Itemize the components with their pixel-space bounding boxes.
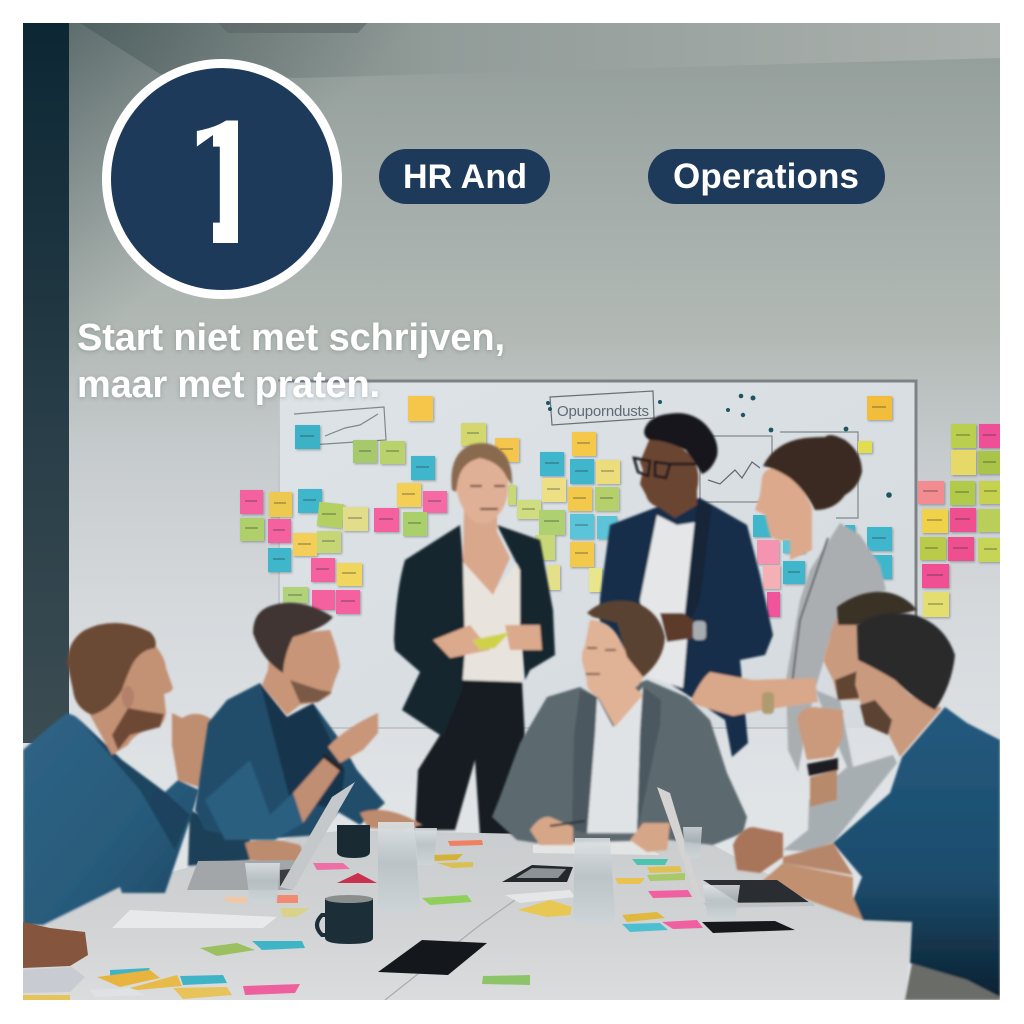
face	[455, 456, 508, 524]
neck and face	[755, 469, 812, 560]
number badge	[106, 46, 338, 294]
badge circle	[106, 64, 338, 294]
person: man with raised hand in blue shirt	[195, 603, 423, 840]
bracelet	[323, 755, 342, 770]
torso shadow	[76, 716, 190, 850]
blazer	[786, 523, 886, 772]
beard	[860, 700, 892, 735]
neck and face	[855, 650, 942, 757]
headline text	[77, 317, 505, 406]
hair	[67, 623, 156, 715]
blazer	[600, 498, 773, 757]
face	[823, 620, 860, 700]
raised hand	[328, 713, 378, 763]
hands	[530, 817, 670, 852]
papers, tablets and phone	[23, 837, 795, 1000]
hair	[253, 603, 333, 673]
neck and chest	[463, 510, 510, 595]
face	[582, 620, 645, 727]
person: woman in black blazer, standing	[394, 443, 555, 835]
t-shirt	[640, 515, 697, 688]
yellow note	[472, 632, 510, 650]
ear	[122, 686, 134, 708]
whiteboard	[278, 380, 916, 728]
face and neck	[262, 630, 340, 715]
hair	[837, 592, 917, 625]
shirt	[195, 683, 385, 840]
pill: HR And: HR And	[403, 158, 527, 196]
beard	[835, 670, 860, 700]
arm and hand	[690, 672, 818, 716]
trousers	[905, 963, 1000, 1000]
fist	[172, 713, 221, 787]
trousers	[415, 680, 530, 835]
ceiling light	[218, 23, 367, 33]
person: woman with hair bun in grey blazer	[690, 435, 886, 772]
right laptop	[657, 787, 815, 908]
handwriting on the sticky notes	[245, 407, 997, 604]
headline text: Start niet met schrijven,	[77, 317, 505, 359]
hair	[451, 443, 512, 492]
person: bearded man in blue shirt, far left	[23, 623, 308, 925]
pill: HR And	[379, 149, 550, 204]
person: man in grey sweater, far side	[783, 592, 917, 852]
shirt	[587, 687, 643, 833]
conference table	[23, 830, 912, 1000]
upper forearm	[783, 843, 853, 875]
headline text: maar met praten.	[77, 364, 380, 406]
person: man in navy blazer, standing	[600, 413, 773, 757]
lapel	[683, 500, 712, 619]
shirt	[833, 707, 1000, 997]
watch	[762, 692, 774, 714]
blazer right	[497, 525, 555, 680]
whiteboard dots	[546, 394, 892, 498]
hands	[733, 827, 783, 873]
shirt	[23, 713, 199, 925]
hair	[857, 613, 955, 710]
neck and face	[90, 640, 173, 755]
pen	[550, 821, 585, 826]
whiteboard sketches: Opuporndusts	[557, 403, 649, 420]
hand and watch	[660, 613, 695, 642]
beard	[112, 708, 164, 750]
table seam	[385, 895, 522, 1000]
sweater	[783, 690, 897, 852]
pill: Operations: Operations	[673, 157, 859, 196]
face	[640, 438, 698, 518]
lower forearm	[760, 863, 863, 920]
chest shadow	[260, 683, 345, 810]
lapels	[572, 687, 661, 833]
water glasses and carafes	[245, 822, 740, 925]
forearm	[810, 770, 837, 807]
blazer	[492, 680, 747, 845]
pill: Operations	[648, 149, 885, 204]
beard	[290, 680, 332, 703]
eyes and mouth	[470, 486, 505, 509]
number 1: 1	[179, 46, 279, 292]
hair	[644, 413, 718, 474]
fist	[797, 707, 843, 760]
eyes and mouth	[586, 648, 616, 674]
forearm	[293, 757, 340, 823]
hair	[587, 600, 665, 677]
person: man with dark hair in blue shirt, foreground right	[733, 613, 1000, 1000]
lapel line	[790, 538, 828, 700]
ceiling	[80, 23, 1000, 78]
person: man in grey suit, centre	[492, 600, 747, 852]
hand at lower left	[23, 922, 88, 968]
dark pillar	[23, 23, 69, 743]
mugs	[317, 825, 373, 944]
blazer left	[394, 525, 465, 737]
hand on table	[360, 810, 423, 830]
left laptop	[187, 782, 355, 890]
glasses	[634, 458, 696, 478]
hair and bun	[763, 435, 862, 510]
sticky notes on the table	[97, 840, 703, 999]
hand on laptop	[245, 839, 308, 866]
blouse	[462, 560, 522, 682]
watch	[807, 758, 838, 776]
far arm	[188, 810, 250, 866]
hands	[433, 625, 542, 658]
sticky notes on the whiteboard	[240, 396, 1000, 617]
whiteboard sketches	[294, 391, 858, 518]
wall shading	[69, 23, 330, 324]
sleeve	[205, 760, 303, 840]
